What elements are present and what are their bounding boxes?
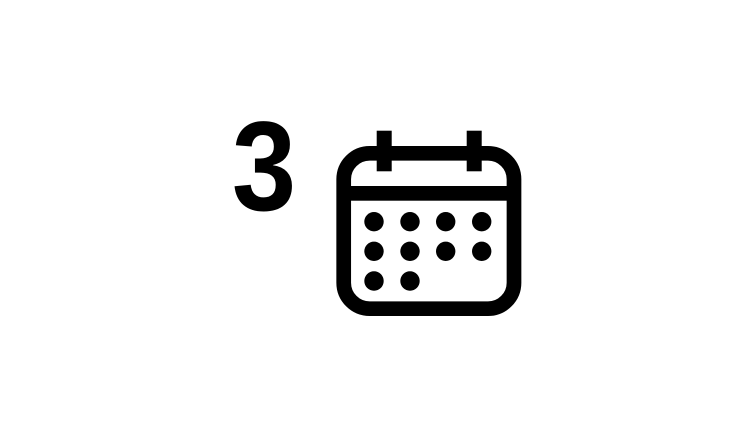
calendar right ring [467, 131, 482, 171]
icon: calendar [340, 131, 518, 309]
calendar header band [340, 186, 518, 201]
calendar body [344, 153, 514, 309]
number 3: 3 [232, 95, 296, 237]
calendar date dots [364, 212, 491, 291]
calendar left ring [377, 131, 392, 171]
